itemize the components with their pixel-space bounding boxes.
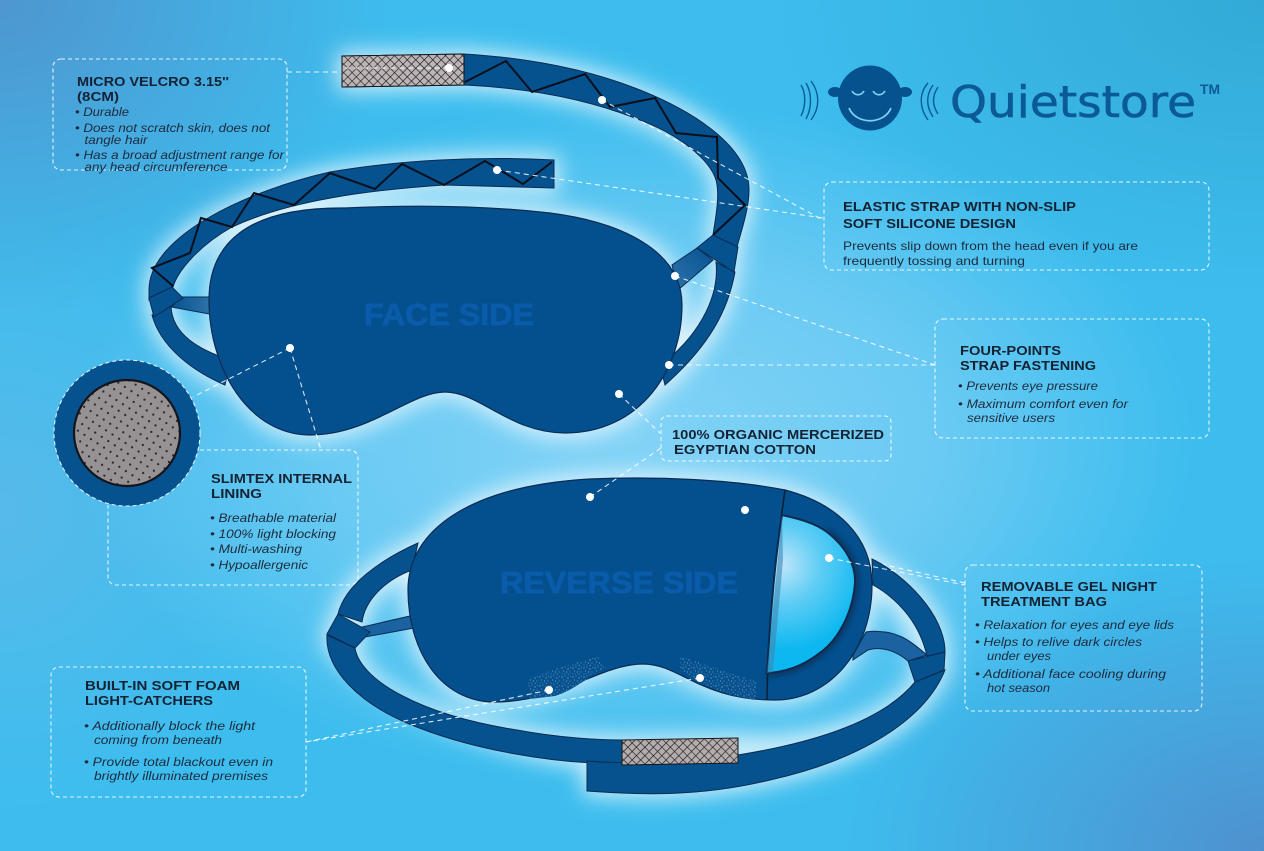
panel: organic cotton: EGYPTIAN COTTON: [674, 442, 816, 457]
panel: four-points strap fastening: FOUR-POINTS: [960, 343, 1061, 358]
panel: removable gel night treatment bag: TREATMENT BAG: [981, 594, 1107, 609]
panel: removable gel night treatment bag: [965, 565, 1202, 711]
panel: built-in soft foam light-catchers: BUILT-IN SOFT FOAM: [85, 678, 240, 693]
label: reverse side: REVERSE SIDE: [500, 565, 738, 600]
panel: micro velcro: • Has a broad adjustment range for: [75, 148, 285, 162]
panel: micro velcro: tangle hair: [84, 133, 149, 147]
leader lines: [193, 68, 965, 742]
gel pocket shadow: [767, 532, 855, 673]
panel: slimtex internal lining: LINING: [211, 486, 262, 501]
panel: micro velcro: any head circumference: [84, 160, 228, 174]
panel: four-points strap fastening: [935, 319, 1209, 438]
panel: built-in soft foam light-catchers: coming from beneath: [94, 733, 222, 747]
panel: four-points strap fastening: • Maximum comfort even for: [958, 397, 1129, 411]
panel: removable gel night treatment bag: • Relaxation for eyes and eye lids: [975, 618, 1174, 632]
panel: built-in soft foam light-catchers: • Additionally block the light: [84, 719, 256, 733]
strap: lower-left and right loops of the face side: [149, 235, 738, 385]
panel: built-in soft foam light-catchers: LIGHT-CATCHERS: [85, 693, 213, 708]
icon: smiling sleeping head: [828, 66, 912, 130]
panel: micro velcro: • Does not scratch skin, does not: [75, 121, 271, 135]
gel bag edge highlight: [767, 515, 783, 673]
panel: slimtex internal lining: • Multi-washing: [210, 542, 302, 556]
panel: four-points strap fastening: STRAP FASTENING: [960, 358, 1096, 373]
panel: micro velcro: MICRO VELCRO 3.15'': [77, 74, 229, 89]
panel: elastic strap: Prevents slip down from the head even if you are: [843, 239, 1138, 253]
panel: four-points strap fastening: sensitive users: [967, 411, 1055, 425]
velcro patch, upper strap: [342, 54, 464, 87]
pocket seam: [767, 490, 785, 700]
panel: removable gel night treatment bag: hot season: [987, 681, 1050, 695]
reverse side straps: [327, 543, 945, 794]
panel: micro velcro: [53, 59, 287, 174]
panel: slimtex internal lining: SLIMTEX INTERNAL: [211, 471, 352, 486]
foam light-catcher, right: [680, 656, 757, 699]
face side mask: [209, 206, 682, 435]
panel: built-in soft foam light-catchers: • Provide total blackout even in: [84, 755, 273, 769]
leader lines behind the product: [287, 72, 965, 583]
foam light-catcher, left: [528, 656, 606, 699]
icon: sound waves left: [801, 81, 818, 120]
panel: organic cotton: [661, 416, 891, 461]
panel: slimtex internal lining: • Breathable material: [210, 511, 336, 525]
anchor dots: [286, 64, 833, 694]
velcro patch, lower strap: [622, 738, 738, 765]
icon: sound waves right: [921, 83, 938, 120]
panel: elastic strap: frequently tossing and turning: [843, 254, 1025, 268]
panel: built-in soft foam light-catchers: [51, 667, 306, 797]
panel: organic cotton: 100% ORGANIC MERCERIZED: [672, 427, 884, 442]
gel bag: [767, 515, 855, 673]
panel: removable gel night treatment bag: • Helps to relive dark circles: [975, 635, 1142, 649]
panel: removable gel night treatment bag: REMOVABLE GEL NIGHT: [981, 579, 1157, 594]
panel: elastic strap: ELASTIC STRAP WITH NON-SLIP: [843, 199, 1076, 214]
slimtex swatch: [54, 360, 200, 506]
panel: removable gel night treatment bag: • Additional face cooling during: [975, 667, 1166, 681]
strap: left elastic strap: [149, 158, 554, 300]
panel: slimtex internal lining: [108, 450, 358, 585]
panel: elastic strap: [824, 182, 1209, 270]
panel: four-points strap fastening: • Prevents eye pressure: [958, 379, 1098, 393]
panel: slimtex internal lining: • Hypoallergenic: [210, 558, 308, 572]
trademark: TM: [1200, 81, 1220, 97]
panel: removable gel night treatment bag: under eyes: [987, 649, 1051, 663]
wordmark: Quietstore: [950, 77, 1196, 128]
white glow around the masks and straps: [149, 54, 945, 794]
panel: built-in soft foam light-catchers: brightly illuminated premises: [94, 769, 268, 783]
strap: upper elastic strap with velcro: [342, 54, 749, 247]
reverse side mask: [408, 478, 872, 702]
panel: elastic strap: SOFT SILICONE DESIGN: [843, 216, 1016, 231]
panel: slimtex internal lining: • 100% light blocking: [210, 527, 336, 541]
label: face side: FACE SIDE: [364, 297, 534, 332]
panel: micro velcro: (8CM): [77, 89, 119, 104]
logo: Quietstore: [801, 66, 1220, 130]
panel: micro velcro: • Durable: [75, 105, 129, 119]
